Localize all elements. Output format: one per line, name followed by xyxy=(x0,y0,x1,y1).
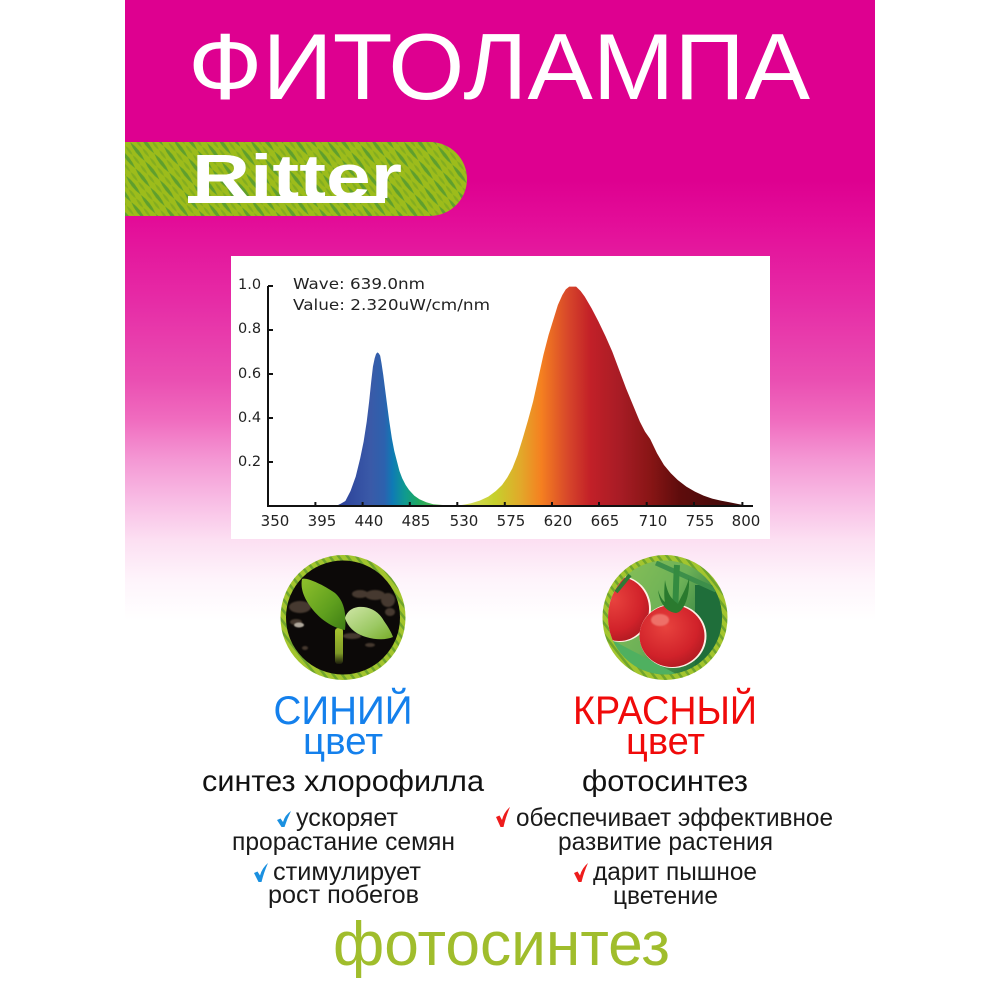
check icon xyxy=(574,863,588,882)
x labels: 575 xyxy=(497,512,525,530)
check icon xyxy=(254,863,268,882)
left column: blue xyxy=(202,687,484,909)
logo banner xyxy=(125,142,467,216)
y labels: 0.2 xyxy=(238,454,261,470)
bullet: development: развитие растения xyxy=(558,828,773,856)
x labels: 530 xyxy=(450,512,478,530)
bullet: seeds: ускоряет xyxy=(296,804,399,832)
icon: seedling photo xyxy=(280,555,406,680)
chart readout: Value: 2.320uW/cm/nm xyxy=(293,296,490,314)
bullet: flowering xyxy=(574,858,757,910)
background panel xyxy=(125,0,875,1000)
x labels: 350 xyxy=(261,512,289,530)
y labels: 0.4 xyxy=(238,410,261,426)
x labels: 440 xyxy=(355,512,383,530)
subheading: цвет: цвет xyxy=(626,721,705,763)
blue curve xyxy=(337,287,747,506)
bullet: flowering: цветение xyxy=(613,882,718,910)
x labels: 800 xyxy=(732,512,760,530)
subtitle: синтез хлорофилла xyxy=(202,765,484,798)
title: ФИТОЛАМПА xyxy=(188,14,810,119)
subheading: цвет: цвет xyxy=(303,721,383,763)
bullet: shoots: рост побегов xyxy=(268,881,419,909)
heading: СИНИЙ: СИНИЙ xyxy=(274,687,412,733)
logo text: Ritter: Ritter xyxy=(192,143,402,212)
chart readout xyxy=(293,275,490,314)
spectrum chart xyxy=(231,256,770,539)
y labels: 0.8 xyxy=(238,321,261,337)
subtitle: фотосинтез xyxy=(582,765,748,798)
bullet: development xyxy=(496,804,833,856)
x labels: 710 xyxy=(639,512,667,530)
red curve xyxy=(457,287,747,506)
check icon xyxy=(496,807,510,827)
bullet: shoots xyxy=(254,858,422,909)
x labels: 620 xyxy=(544,512,572,530)
x labels xyxy=(261,512,760,530)
footer word: фотосинтез xyxy=(333,910,670,979)
x labels: 755 xyxy=(686,512,714,530)
icon: tomato photo xyxy=(602,555,728,680)
x labels: 665 xyxy=(591,512,619,530)
bullet: flowering: дарит пышное xyxy=(593,858,757,886)
y labels xyxy=(238,277,261,470)
x labels: 485 xyxy=(402,512,430,530)
bullet: shoots: стимулирует xyxy=(273,858,422,886)
y labels: 0.6 xyxy=(238,366,261,382)
check icon xyxy=(277,811,291,827)
bullet: seeds: прорастание семян xyxy=(232,828,455,856)
axes xyxy=(268,286,753,506)
y labels: 1.0 xyxy=(238,277,261,293)
heading: КРАСНЫЙ: КРАСНЫЙ xyxy=(573,687,757,733)
chart readout: Wave: 639.0nm xyxy=(293,275,425,293)
x labels: 395 xyxy=(308,512,336,530)
right column: red xyxy=(496,687,833,910)
bullet: development: обеспечивает эффективное xyxy=(516,804,833,832)
bullet: seeds xyxy=(232,804,455,856)
